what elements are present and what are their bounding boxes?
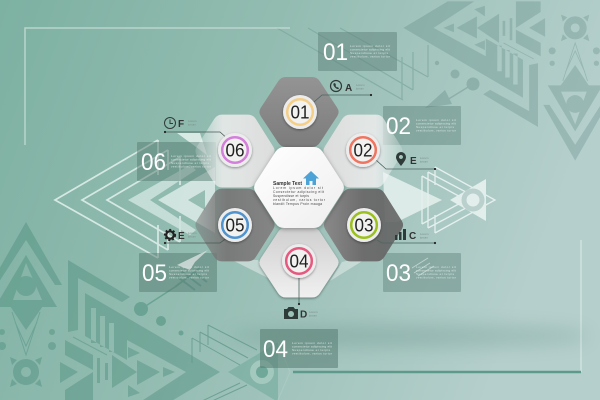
text box 04: 04 bbox=[263, 336, 288, 363]
text box 05 bbox=[139, 250, 217, 292]
hexagon 04 bbox=[259, 228, 339, 298]
text box 01: 01 bbox=[323, 39, 348, 66]
text box 03: Lorem ipsum dolor sit bbox=[416, 265, 456, 269]
text box 06 bbox=[137, 142, 216, 181]
center body text: Suspendisse et turpis bbox=[273, 194, 309, 198]
text box 01 bbox=[318, 32, 397, 71]
background pattern: bottom-left motif bbox=[0, 222, 220, 400]
center body text: Consectetur adipiscing elit bbox=[273, 190, 324, 194]
hexagon 05 bbox=[195, 189, 275, 261]
connector 06 with clock icon: Lorem bbox=[188, 119, 197, 123]
text box 06: Lorem ipsum dolor sit bbox=[171, 154, 211, 158]
connector 03 with bars icon: Lorem bbox=[420, 232, 429, 236]
connector 03 with bars icon: C bbox=[409, 231, 416, 242]
text box 06: 06 bbox=[141, 149, 166, 176]
frame lines bbox=[25, 28, 581, 372]
connector 04 with camera icon: ipsum bbox=[309, 314, 318, 318]
text box 01: Suspendisse et turpis bbox=[350, 51, 388, 55]
center body text: blandit Tempus Proin mauga bbox=[273, 202, 322, 206]
text box 05: Lorem ipsum dolor sit bbox=[169, 265, 209, 269]
text box 04: consectetur adipiscing elit bbox=[292, 344, 332, 348]
connector 06 with clock icon bbox=[164, 118, 229, 140]
top outlined chevrons bbox=[277, 28, 428, 100]
hexagon 02 bbox=[323, 115, 403, 187]
badge 01: 01 bbox=[290, 102, 310, 122]
badge 04 bbox=[282, 244, 316, 278]
connector 03 with bars icon: ipsum bbox=[420, 236, 429, 240]
connector 06 with clock icon: ipsum bbox=[188, 122, 197, 126]
text box 06: Suspendisse et turpis bbox=[171, 161, 210, 165]
center hexagon bbox=[254, 147, 344, 228]
connector 06 with clock icon: F bbox=[178, 119, 184, 130]
shadow wedges under hexagons bbox=[232, 255, 372, 281]
text box 01: consectetur adipiscing elit bbox=[350, 48, 390, 52]
hexagon 06 bbox=[195, 115, 275, 187]
connector 01 with phone icon: Lorem bbox=[356, 83, 365, 87]
text box 03: consectetur adipiscing elit bbox=[416, 268, 456, 272]
text box 06: consectetur adipiscing elit bbox=[171, 158, 211, 162]
text box 02: Lorem ipsum dolor sit bbox=[416, 118, 456, 122]
text box 02: Suspendisse et turpis bbox=[416, 125, 454, 129]
text box 03 bbox=[383, 253, 461, 292]
text box 06: vestibulum, varius tortor bbox=[171, 164, 211, 168]
badge 06: 06 bbox=[226, 140, 244, 160]
arrow with circle: top-right bbox=[425, 61, 480, 108]
central line pattern: left arrows bbox=[55, 133, 215, 258]
badge 03: 03 bbox=[354, 214, 374, 236]
badge 06 bbox=[218, 133, 252, 167]
text box 05: Suspendisse et turpis bbox=[169, 272, 208, 276]
text box 01: Lorem ipsum dolor sit bbox=[350, 44, 390, 48]
badge 03 bbox=[347, 208, 381, 242]
text box 04 bbox=[260, 329, 338, 368]
text box 03: vestibulum, varius tortor bbox=[416, 276, 456, 280]
connector 02 with pin icon: Lorem bbox=[420, 156, 429, 160]
ground shadow bbox=[230, 325, 590, 347]
text box 02: vestibulum, varius tortor bbox=[416, 128, 456, 132]
connector 03 with bars icon bbox=[377, 229, 436, 244]
central line pattern: right arrows bbox=[383, 167, 495, 233]
connector 02 with pin icon: E bbox=[410, 156, 417, 167]
connector 05 with gear icon bbox=[164, 230, 228, 244]
icon: house bbox=[303, 171, 319, 185]
badge 01 bbox=[283, 95, 317, 129]
bottom target with outlined chevrons bbox=[192, 325, 290, 400]
text box 05: vestibulum, varius tortor bbox=[169, 276, 209, 280]
center body text: vestibulum, varius tortor bbox=[273, 198, 326, 202]
connector 04 with camera icon: Lorem bbox=[309, 310, 318, 314]
connector 05 with gear icon: Lorem bbox=[188, 231, 197, 235]
badge 02 bbox=[346, 133, 380, 167]
connector 05 with gear icon: E bbox=[178, 231, 185, 242]
center heading: Sample Text bbox=[273, 181, 302, 187]
connector 04 with camera icon bbox=[284, 278, 318, 320]
text box 05: consectetur adipiscing elit bbox=[169, 268, 209, 272]
text box 03: 03 bbox=[386, 260, 411, 287]
hexagon 03 bbox=[324, 189, 403, 261]
text box 04: vestibulum, varius tortor bbox=[292, 352, 332, 356]
text box 02: 02 bbox=[386, 113, 411, 140]
center body text bbox=[273, 186, 326, 206]
connector 02 with pin icon: ipsum bbox=[420, 160, 429, 164]
text box 02: consectetur adipiscing elit bbox=[416, 122, 456, 126]
connector 02 with pin icon bbox=[376, 152, 436, 170]
connector 04 with camera icon: D bbox=[300, 310, 307, 320]
text box 02 bbox=[383, 106, 461, 145]
badge 05: 05 bbox=[226, 214, 244, 236]
text box 01: vestibulum, varius tortor bbox=[350, 54, 390, 58]
badge 02: 02 bbox=[354, 140, 372, 160]
badge 04: 04 bbox=[290, 250, 308, 272]
connector 01 with phone icon bbox=[314, 80, 372, 102]
text box 05: 05 bbox=[142, 260, 167, 287]
center body text: Lorem ipsum dolor sit bbox=[273, 186, 323, 190]
connector 05 with gear icon: ipsum bbox=[188, 234, 197, 238]
text box 04: Lorem ipsum dolor sit bbox=[292, 341, 332, 345]
text box 03: Suspendisse et turpis bbox=[416, 272, 454, 276]
background pattern: top-right motif bbox=[403, 1, 600, 161]
connector 01 with phone icon: ipsum bbox=[356, 86, 365, 90]
badge 05 bbox=[218, 208, 252, 242]
hexagon 01 bbox=[259, 77, 339, 147]
connector 01 with phone icon: A bbox=[345, 83, 352, 94]
arrow with circle: bottom-left bbox=[134, 267, 207, 336]
text box 04: Suspendisse et turpis bbox=[292, 348, 330, 352]
